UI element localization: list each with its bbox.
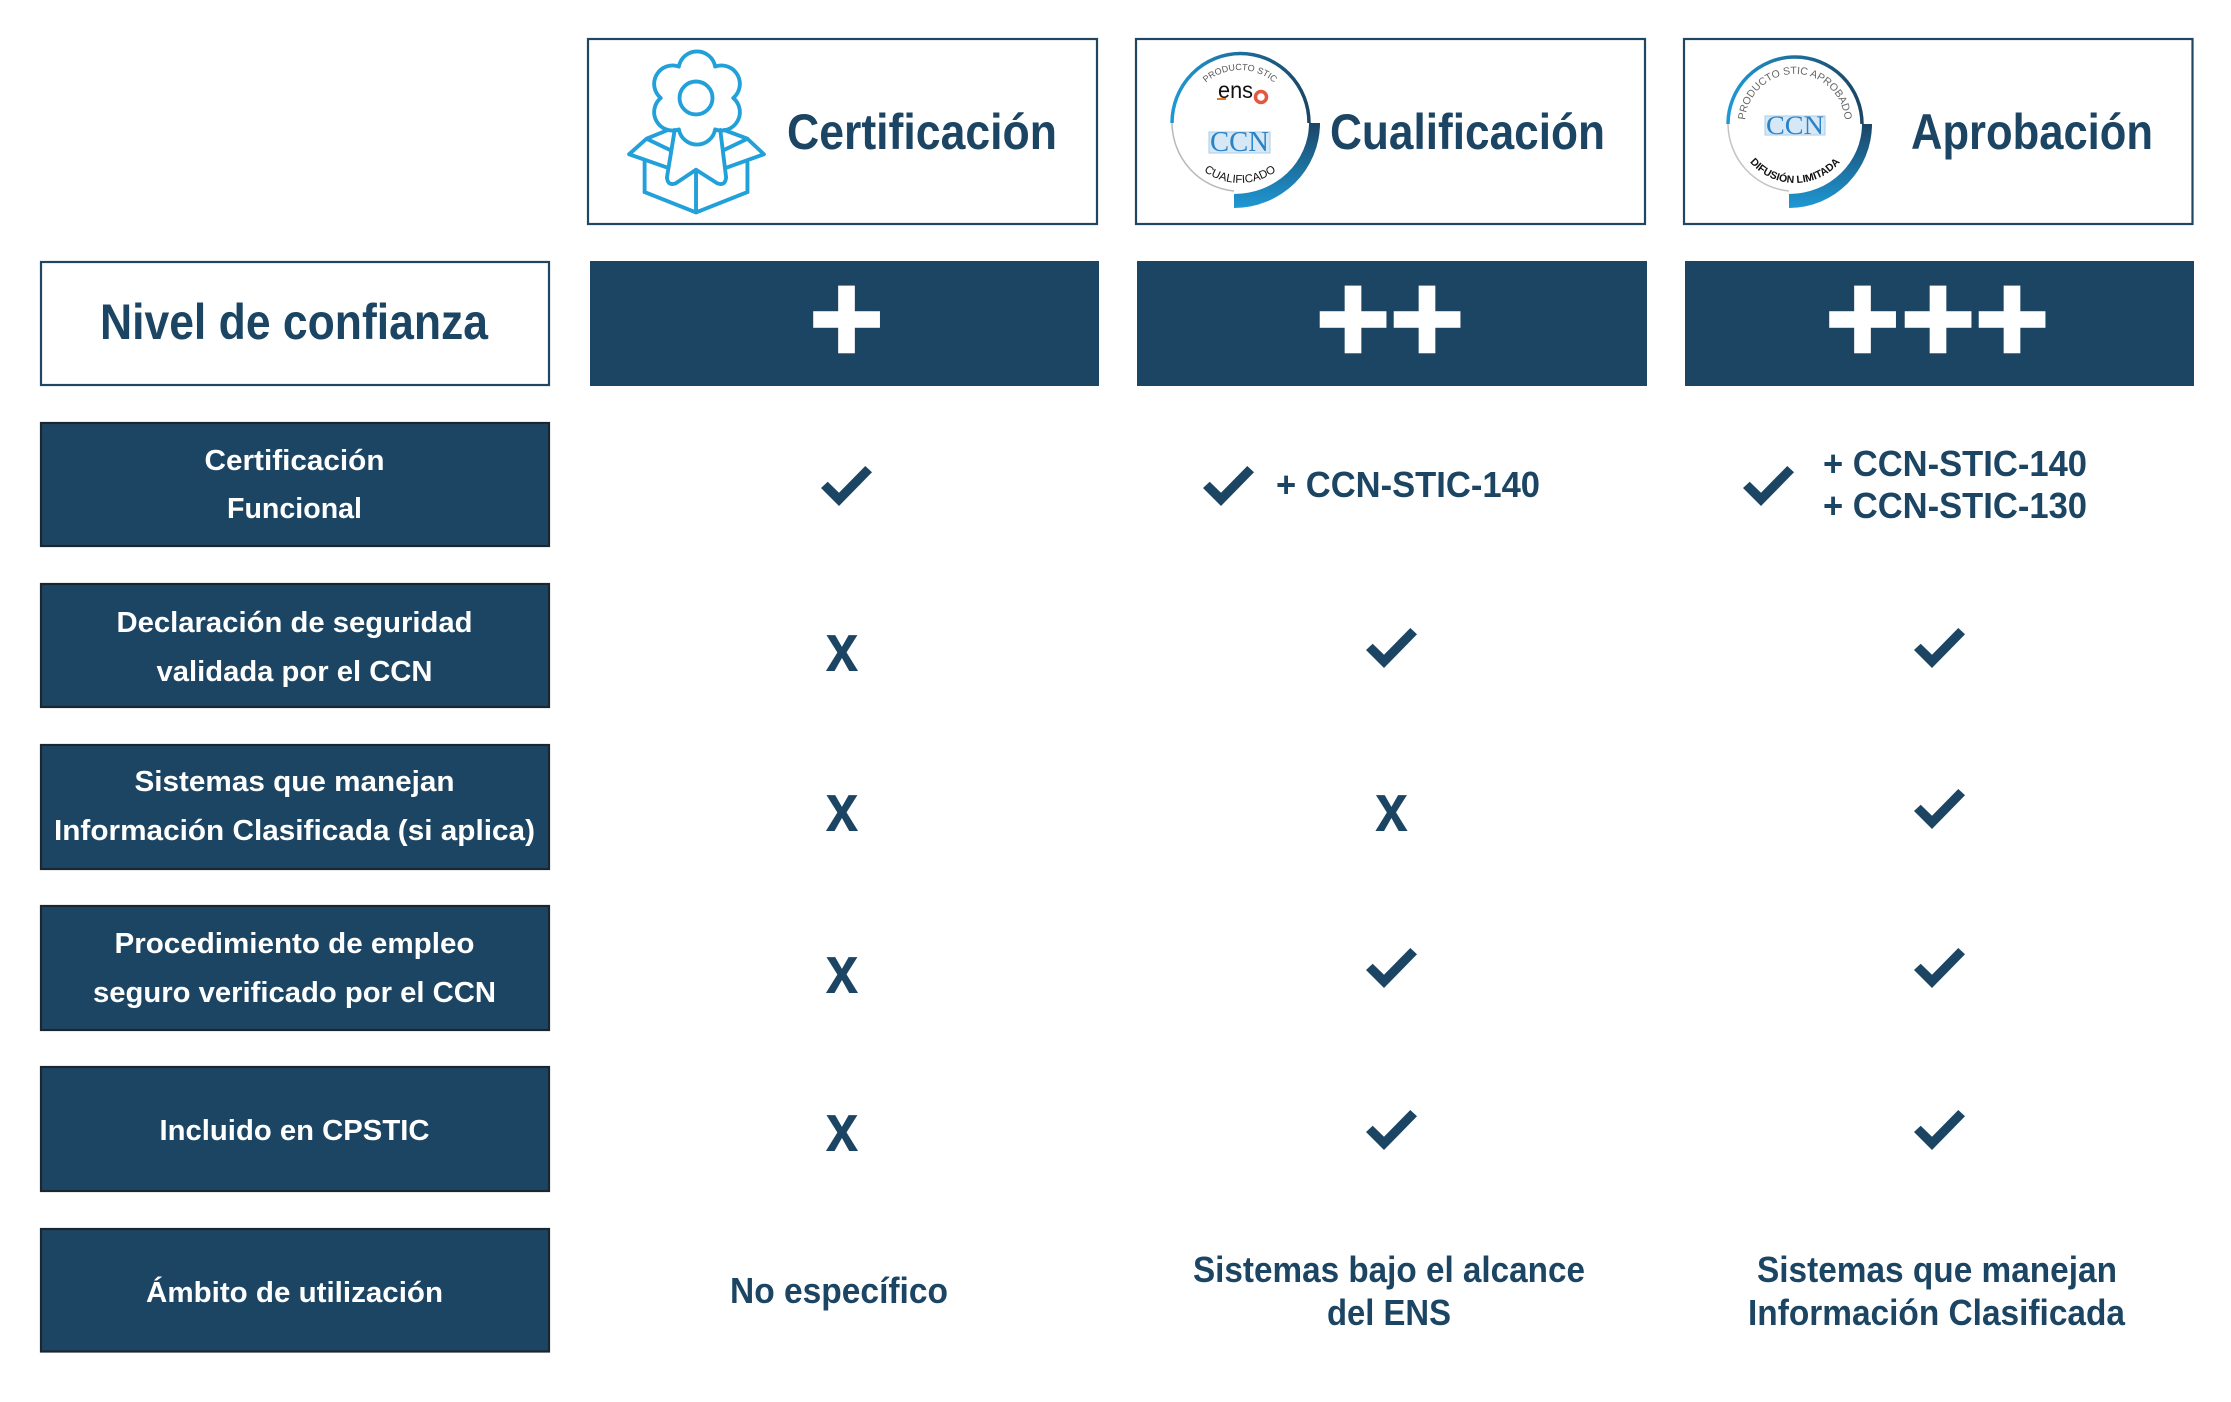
icon: x, Certificación / sistemas: x xyxy=(826,770,859,846)
heading: Certificación: Certificación xyxy=(787,104,1057,160)
bar: confidence level +: + xyxy=(809,247,884,390)
panel: Nivel de confianza label xyxy=(41,262,549,385)
text + check: Cualificación / funcional: + CCN-STIC-140 xyxy=(1276,464,1540,505)
panel: Aprobación header xyxy=(1682,38,2194,226)
panel: Cualificación header xyxy=(1134,38,1646,226)
bar: confidence level +++ xyxy=(1685,247,2194,390)
icon: check, Aprobación / procedimiento xyxy=(1914,948,1965,988)
row label: Incluido en CPSTIC: Incluido en CPSTIC xyxy=(160,1115,430,1147)
text + check: Aprobación / funcional: + CCN-STIC-130 xyxy=(1823,485,2087,526)
icon: Producto STIC ENS cualificado seal xyxy=(1170,52,1320,208)
text + check: Aprobación / funcional: + CCN-STIC-140 xyxy=(1823,443,2087,484)
bar: confidence level ++ xyxy=(1137,247,1647,390)
icon: Producto STIC aprobado seal: PRODUCTO STIC APROBADO xyxy=(1738,66,1852,120)
icon: Producto STIC ENS cualificado seal: ens xyxy=(1218,77,1253,103)
row label: Procedimiento de empleo seguro: seguro verificado por el CCN xyxy=(93,977,496,1009)
text + check: Aprobación / funcional xyxy=(1743,443,2087,526)
text: No específico: No específico xyxy=(730,1270,948,1311)
heading: Cualificación: Cualificación xyxy=(1330,104,1605,160)
row label: Procedimiento de empleo seguro: Procedimiento de empleo xyxy=(114,928,474,960)
row label: Certificación Funcional: Funcional xyxy=(227,493,362,525)
icon: Producto STIC aprobado seal: CCN xyxy=(1766,111,1824,140)
text: Sistemas que manejan Información Clasificada: Información Clasificada xyxy=(1748,1292,2126,1333)
icon: Producto STIC ENS cualificado seal: PRODUCTO STIC xyxy=(1202,64,1277,82)
icon: x, Certificación / declaración: x xyxy=(826,610,859,686)
row label: Sistemas que manejan información clasificada: Sistemas que manejan xyxy=(134,766,454,798)
icon: Producto STIC ENS cualificado seal: CUALIFICADO xyxy=(1206,166,1274,183)
row label: Sistemas que manejan información clasificada: Información Clasificada (si aplica) xyxy=(54,815,535,847)
icon: x, Cualificación / sistemas: x xyxy=(1375,770,1408,846)
row label: Certificación Funcional: Certificación xyxy=(204,445,384,477)
row label: Declaración de seguridad: validada por el CCN xyxy=(156,656,432,688)
icon: Producto STIC ENS cualificado seal: CCN xyxy=(1210,127,1269,158)
icon: Producto STIC aprobado seal: DIFUSIÓN LIMITADA xyxy=(1750,158,1840,183)
icon: check, Aprobación / CPSTIC xyxy=(1914,1110,1965,1150)
row label: Certificación Funcional xyxy=(41,423,549,546)
icon: Producto STIC aprobado seal xyxy=(1726,55,1872,208)
bar: confidence level ++: ++ xyxy=(1316,247,1464,390)
icon: flower in open box xyxy=(629,51,764,212)
heading: Aprobación: Aprobación xyxy=(1911,104,2153,160)
row label: Declaración de seguridad xyxy=(41,584,549,707)
row label: Procedimiento de empleo seguro xyxy=(41,906,549,1030)
icon: check, Cualificación / declaración xyxy=(1366,628,1417,668)
bar: confidence level + xyxy=(590,247,1099,390)
panel: Certificación header xyxy=(588,39,1097,224)
row label: Ámbito de utilización: Ámbito de utilización xyxy=(146,1275,443,1309)
icon: check, Aprobación / declaración xyxy=(1914,628,1965,668)
text: Sistemas bajo el alcance del ENS xyxy=(1193,1249,1585,1333)
text: Sistemas que manejan Información Clasificada: Sistemas que manejan xyxy=(1757,1249,2117,1290)
icon: check, Certificación / funcional xyxy=(821,466,872,506)
row label: Declaración de seguridad: Declaración de seguridad xyxy=(116,607,472,639)
icon: check, Cualificación / CPSTIC xyxy=(1366,1110,1417,1150)
row label: Incluido en CPSTIC xyxy=(41,1067,549,1191)
bar: confidence level +++: +++ xyxy=(1825,247,2049,390)
icon: check, Aprobación / sistemas xyxy=(1914,789,1965,829)
icon: x, Certificación / procedimiento: x xyxy=(826,932,859,1008)
panel: Nivel de confianza label: Nivel de confianza xyxy=(100,294,489,350)
text: Sistemas bajo el alcance del ENS: del ENS xyxy=(1327,1292,1451,1333)
text: Sistemas que manejan Información Clasificada xyxy=(1748,1249,2126,1333)
text: Sistemas bajo el alcance del ENS: Sistemas bajo el alcance xyxy=(1193,1249,1585,1290)
row label: Sistemas que manejan información clasificada xyxy=(41,745,549,869)
icon: x, Certificación / CPSTIC: x xyxy=(826,1090,859,1166)
icon: check, Cualificación / procedimiento xyxy=(1366,948,1417,988)
row label: Ámbito de utilización xyxy=(41,1229,549,1352)
